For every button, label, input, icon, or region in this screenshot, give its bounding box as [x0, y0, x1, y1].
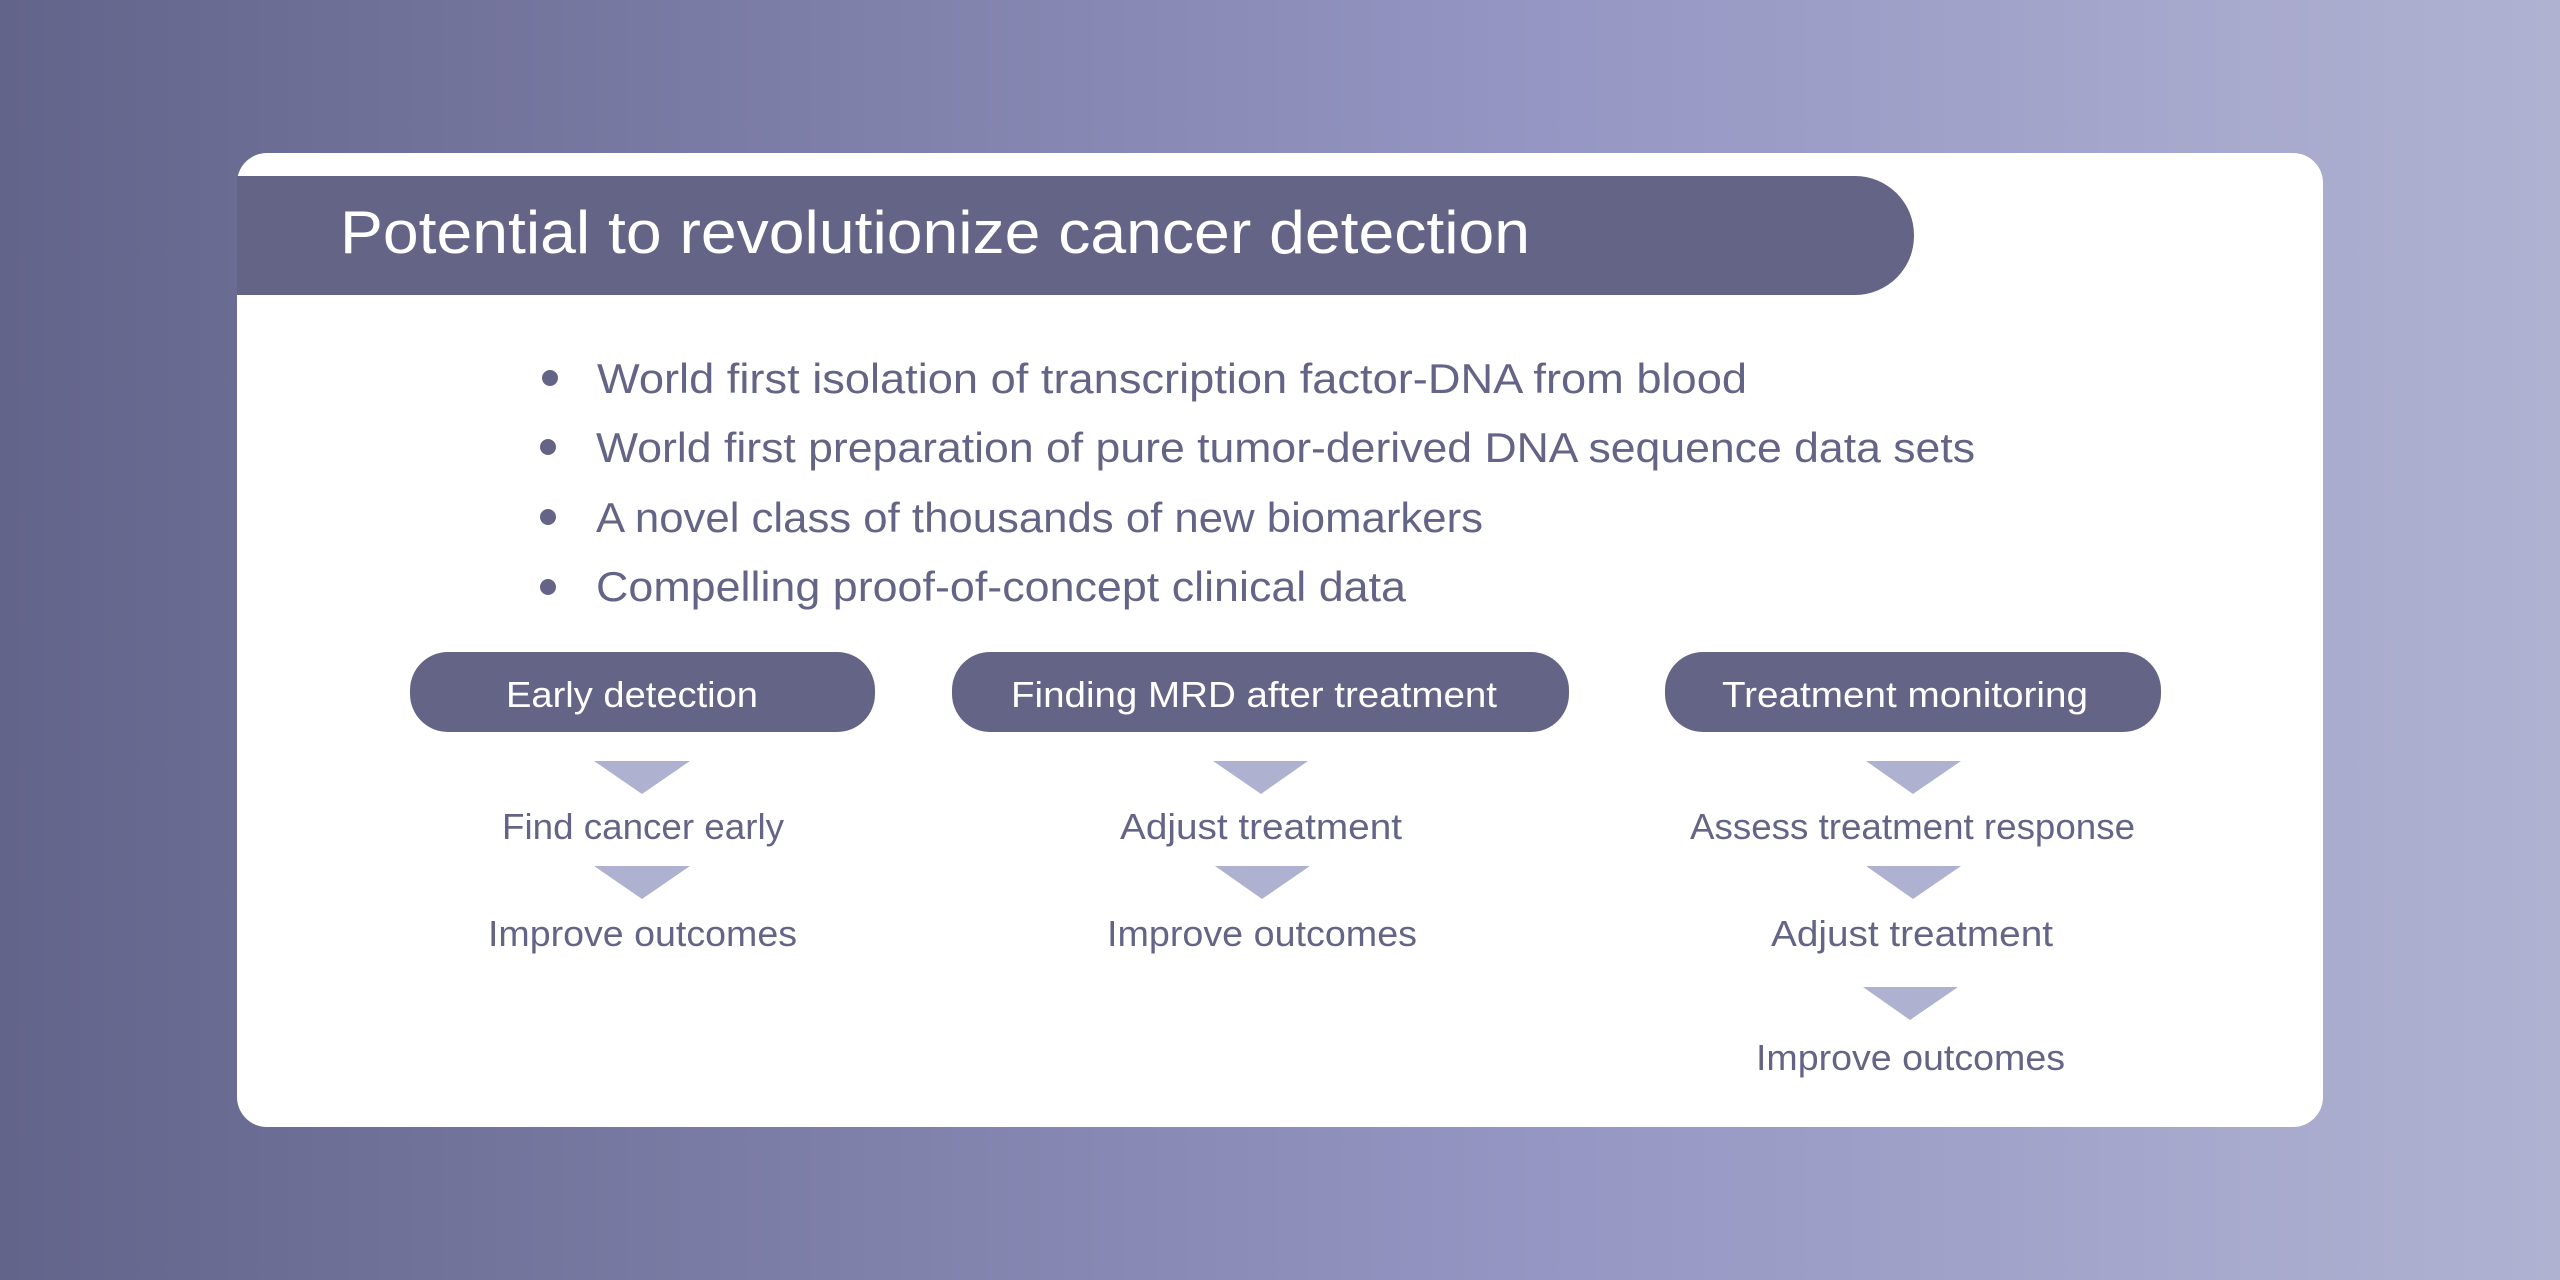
pill label: Early detection: [506, 674, 758, 715]
step: adjust treatment: Adjust treatment: [1120, 806, 1402, 847]
column: early detection: [410, 652, 875, 954]
heading banner: [237, 176, 1914, 295]
panel: main white card: [237, 153, 2323, 1127]
arrow down 1: [1866, 761, 1961, 794]
step: find cancer early: Find cancer early: [502, 806, 784, 847]
step: improve outcomes: Improve outcomes: [488, 913, 797, 954]
bullet dot 3: [540, 509, 556, 525]
title: Potential to revolutionize cancer detection: [340, 199, 1530, 266]
pill shape: [410, 652, 875, 732]
arrow down 1: [594, 761, 690, 794]
pill: early detection: [410, 652, 875, 732]
column: finding MRD after treatment: [952, 652, 1569, 954]
bullet text 3: A novel class of thousands of new biomarkers: [596, 494, 1483, 541]
bullet dot 2: [540, 439, 556, 455]
pill shape: [1665, 652, 2161, 732]
arrow down 2: [594, 866, 690, 899]
column: treatment monitoring: [1665, 652, 2161, 1078]
arrow down 2: [1866, 866, 1961, 899]
step: improve outcomes: Improve outcomes: [1107, 913, 1417, 954]
bullet text 1: World first isolation of transcription factor-DNA from blood: [597, 355, 1747, 402]
step: assess treatment response: Assess treatment response: [1690, 806, 2135, 847]
bullet 2: [540, 424, 1975, 471]
arrow down 3: [1863, 987, 1958, 1020]
pill: finding MRD: [952, 652, 1569, 732]
bullet dot 1: [542, 370, 558, 386]
arrow down 1: [1213, 761, 1308, 794]
bullet 1: [542, 355, 1747, 402]
step: improve outcomes: Improve outcomes: [1756, 1037, 2065, 1078]
pill label: Treatment monitoring: [1722, 674, 2088, 715]
pill: treatment monitoring: [1665, 652, 2161, 732]
step: adjust treatment: Adjust treatment: [1771, 913, 2053, 954]
bullet text 4: Compelling proof-of-concept clinical data: [596, 563, 1407, 610]
pill label: Finding MRD after treatment: [1011, 674, 1497, 715]
card surface: [237, 153, 2323, 1127]
bullet list: [540, 355, 1975, 610]
pill shape: [952, 652, 1569, 732]
bullet text 2: World first preparation of pure tumor-derived DNA sequence data sets: [596, 424, 1975, 471]
arrow down 2: [1215, 866, 1310, 899]
bullet dot 4: [540, 579, 556, 595]
banner shape: [237, 176, 1914, 295]
bullet 4: [540, 563, 1407, 610]
bullet 3: [540, 494, 1483, 541]
